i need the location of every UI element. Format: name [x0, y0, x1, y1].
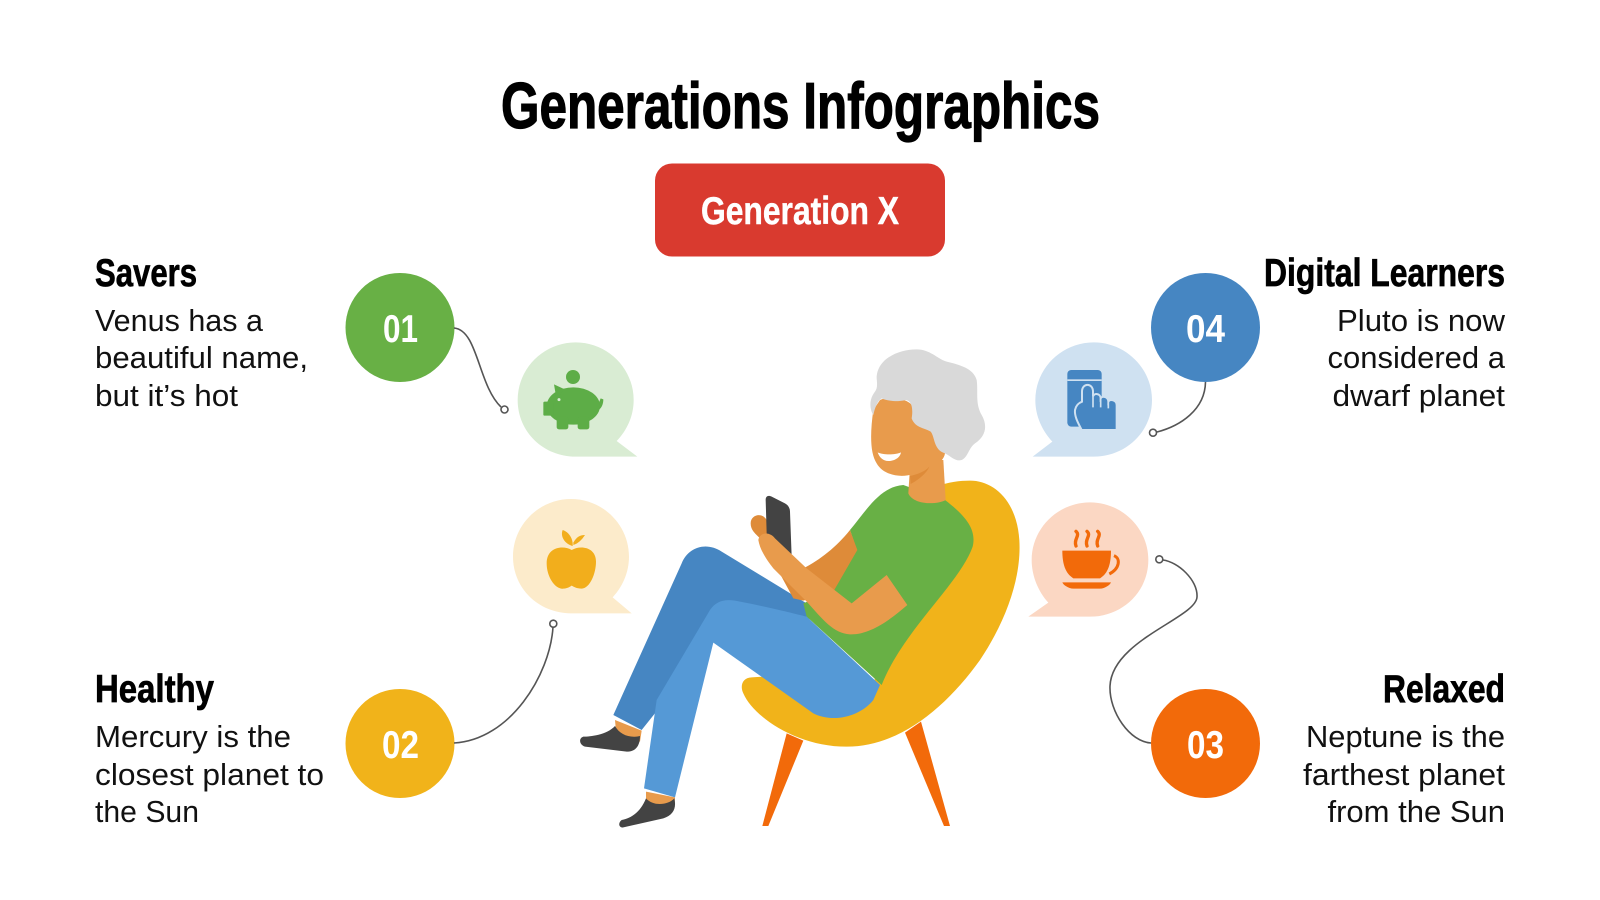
panel: Healthy text: closest planet to: [95, 758, 324, 792]
head and neck: [871, 398, 946, 503]
panel: Digital Learners text: Pluto is now: [1337, 304, 1506, 338]
bubble: apple: [513, 499, 632, 613]
bubble: coffee cup: [1028, 502, 1148, 617]
chair: [742, 481, 1020, 747]
panel: Savers text: but it’s hot: [95, 379, 239, 413]
title: Generations Infographics: [501, 69, 1100, 142]
badge: Generation X: [655, 164, 945, 256]
far leg: [580, 547, 810, 752]
number circle 03: 03: [1187, 724, 1224, 767]
icon: piggy bank: [543, 370, 603, 429]
icon: phone with hand: [1067, 370, 1117, 430]
panel: Relaxed text: Relaxed: [1383, 668, 1505, 711]
panel: Savers text: [95, 252, 308, 413]
panel: Relaxed text: Neptune is the: [1306, 720, 1505, 754]
connector 01: [454, 328, 508, 413]
number circle 04: 04: [1186, 308, 1225, 351]
panel: Digital Learners text: considered a: [1328, 341, 1505, 375]
figure: person seated in chair with phone: [580, 349, 1020, 827]
far arm: [751, 515, 857, 601]
panel: Healthy text: Mercury is the: [95, 720, 291, 754]
phone: [766, 496, 792, 557]
connector 03: [1110, 556, 1197, 743]
panel: Relaxed text: from the Sun: [1328, 795, 1505, 829]
panel: Digital Learners text: [1264, 252, 1506, 413]
number circle 02: [346, 689, 454, 798]
panel: Relaxed text: [1303, 668, 1506, 829]
panel: Relaxed text: farthest planet: [1303, 758, 1506, 792]
panel: Savers text: Savers: [95, 252, 197, 295]
panel: Savers text: Venus has a: [95, 304, 263, 338]
number circle 01: 01: [383, 308, 418, 351]
near arm: [758, 534, 907, 634]
connector 04: [1150, 382, 1206, 436]
number circle 04: [1151, 273, 1260, 382]
bubble: phone touch: [1033, 342, 1152, 457]
bubble: piggy bank: [518, 342, 637, 457]
badge: Generation X: Generation X: [701, 190, 899, 233]
chair legs: [762, 722, 950, 826]
near leg: [619, 600, 880, 827]
panel: Healthy text: the Sun: [95, 795, 199, 829]
number circle 01: [346, 273, 454, 382]
panel: Digital Learners text: dwarf planet: [1332, 379, 1506, 413]
panel: Digital Learners text: Digital Learners: [1264, 252, 1505, 295]
panel: Healthy text: [95, 668, 324, 829]
icon: apple: [547, 530, 596, 589]
hair: [870, 349, 985, 460]
panel: Savers text: beautiful name,: [95, 341, 308, 375]
number circle 03: [1151, 689, 1260, 798]
number circle 02: 02: [382, 724, 419, 767]
icon: coffee cup: [1062, 531, 1118, 589]
shirt: [803, 485, 974, 685]
panel: Healthy text: Healthy: [95, 668, 214, 711]
connector 02: [454, 620, 557, 743]
